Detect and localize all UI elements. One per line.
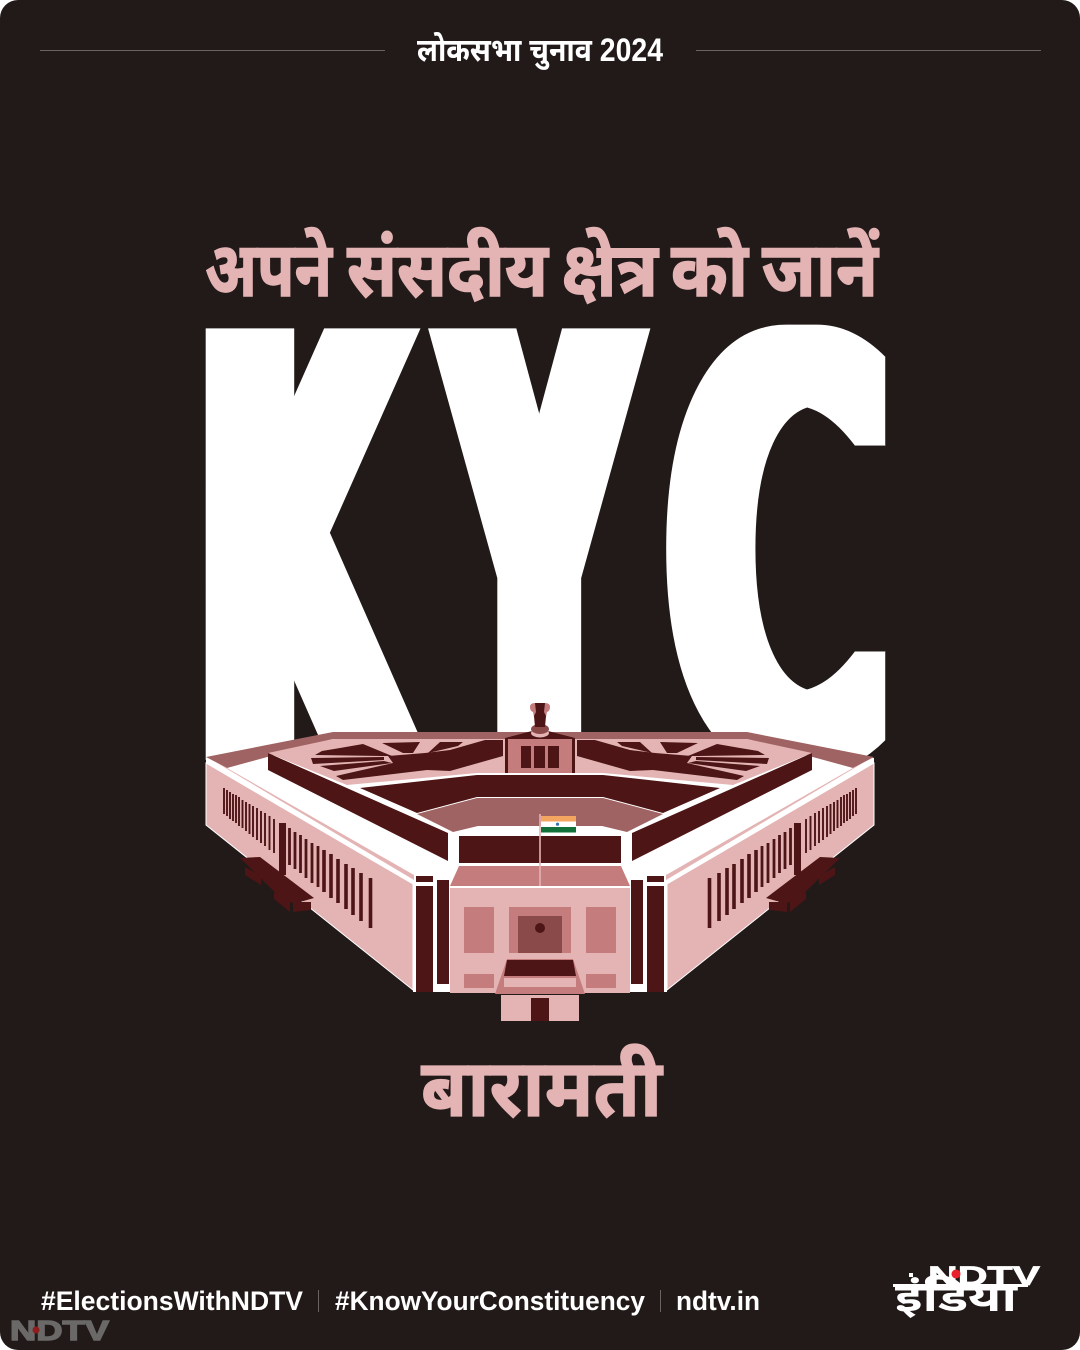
central tower block [505,731,575,773]
door emblem circle [535,923,545,933]
right roof sunburst pattern [577,740,769,780]
NDTV India logo [893,1261,1040,1320]
inner courtyard floor [417,798,663,832]
heading: know your constituency: को [671,228,749,313]
heading: know your constituency: जानें [762,227,880,313]
NDTV watermark logo: NDTV [10,1315,109,1346]
parapet [206,732,874,768]
heading: know your constituency [205,227,880,313]
entrance porch [501,995,579,1021]
left roof block [268,753,448,861]
left wall windows [224,788,370,928]
NDTV India logo: NDTV [928,1261,1040,1291]
header: election label with rules: लोकसभा चुनाव 2024 [417,32,663,70]
heading: know your constituency: अपने [205,228,333,313]
big KYC wordmark: Y [445,211,632,901]
right wall [667,763,874,990]
footer hashtags [41,1286,760,1316]
footer hashtags: #KnowYourConstituency [335,1286,645,1316]
footer hashtags: ndtv.in [676,1286,760,1316]
right wall windows [710,788,856,928]
inner courtyard dark [360,775,720,813]
footer hashtags: #ElectionsWithNDTV [41,1286,303,1316]
constituency name: बारामती [421,1044,663,1133]
heading: know your constituency: क्षेत्र [562,228,659,313]
right roof block [632,753,812,861]
entrance steps [495,959,585,994]
front pillars [416,876,664,992]
roof top surface [268,739,812,785]
left roof sunburst pattern [311,740,503,780]
big KYC wordmark [202,210,890,905]
heading: know your constituency: संसदीय [347,228,550,313]
NDTV India logo: इंडिया [895,1275,1019,1320]
front upper dark panel [459,836,621,863]
illustration: parliament building [206,703,874,1021]
right side entrance and steps [766,823,840,912]
front facade [450,888,630,993]
white terrace base [206,736,874,992]
facade windows [464,907,616,988]
left side entrance and steps [240,823,314,912]
big KYC wordmark: K [202,210,412,900]
front sloped roof [450,866,630,886]
big KYC wordmark: C [666,216,890,905]
left wall [206,763,413,990]
central door panel [518,916,562,953]
icon: indian flag [539,814,576,886]
front parapet bands [212,760,868,880]
icon: national emblem [530,703,550,738]
